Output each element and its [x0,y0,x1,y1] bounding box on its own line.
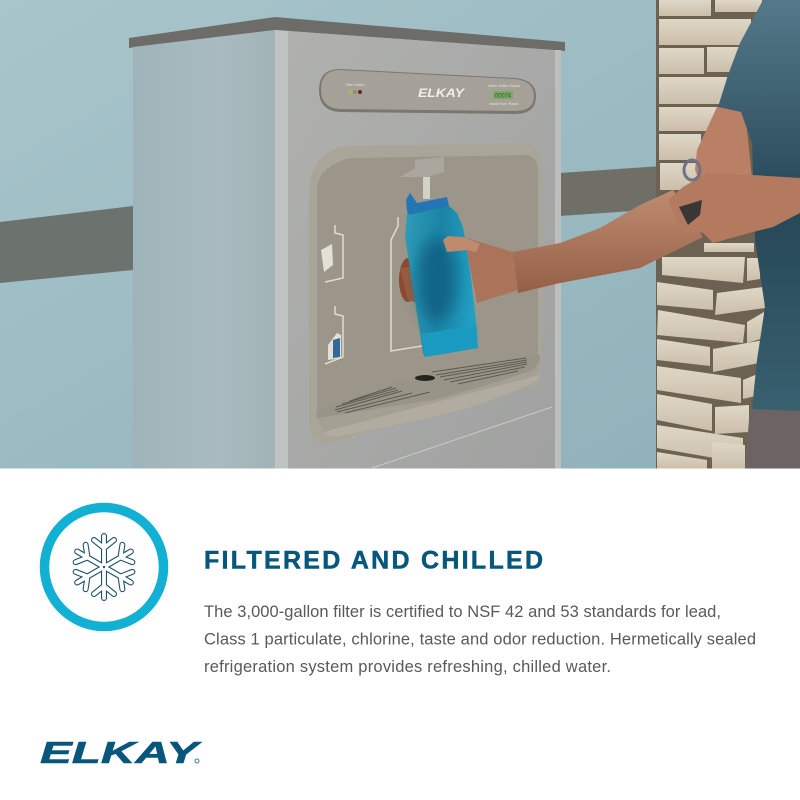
metal wall band left [0,206,133,283]
person: gripping hand and ring [668,160,800,243]
counter labels: Water Bottles Saved [488,84,520,88]
body text: refrigeration system provides refreshing, chilled water. [204,658,611,676]
person: pants [745,408,800,468]
control panel [319,69,536,114]
white lower section [0,468,800,800]
drip tray front [317,358,540,437]
body text: The 3,000-gallon filter is certified to NSF 42 and 53 standards for lead, [204,603,721,621]
dispenser alcove [309,143,542,445]
icon: hand at sensor [321,244,333,272]
reaching arm [513,190,703,293]
bottle lid [406,193,449,215]
metal wall band right [560,166,662,216]
water bottle [405,193,478,357]
water unit: lower panel seam [372,407,552,468]
icon panel: sensor outline [325,217,422,364]
thumb over bottle [443,236,480,252]
water unit: right edge [555,50,561,468]
alcove bezel [309,143,542,445]
bottle lower highlight [421,325,478,357]
wall background [0,0,800,468]
water unit: front corner trim [275,30,288,468]
drip tray lip shadow [323,375,540,436]
person: upper arm [695,107,752,182]
water unit: side panel [133,30,275,468]
ring [684,160,700,180]
sensor light [399,258,417,302]
control panel: 00074 [495,94,512,100]
drip tray grate [335,358,527,413]
icon: snowflake in circle [44,508,164,626]
bottle shadow [417,238,457,322]
status label: Filter Status [346,83,365,87]
person: t-shirt [718,0,800,411]
green counter display [493,91,513,99]
registered mark [195,759,199,763]
hand gripping bottle [463,237,518,303]
water unit: top cap [129,17,565,51]
body text: Class 1 particulate, chlorine, taste and odor reduction. Hermetically sealed [204,630,756,648]
body text [204,603,756,676]
icon: bottle at sensor [328,333,341,360]
water stream [423,177,430,199]
dark object in hand [679,200,702,225]
logo: Elkay [40,735,203,770]
photo: water bottle filling station [0,0,800,468]
alcove recess [317,155,538,420]
heading: FILTERED AND CHILLED [204,546,543,574]
logo: Elkay: ELKAY [40,735,203,770]
control panel: Waste from Plastic [489,102,519,106]
panel logo: ELKAY [418,86,465,100]
status lights [348,90,352,94]
hand fingers behind bottle [400,265,425,305]
drip tray top [316,355,540,418]
spout [400,157,444,177]
water unit: front panel [288,31,555,468]
drain [415,375,435,381]
brick column [656,0,766,468]
